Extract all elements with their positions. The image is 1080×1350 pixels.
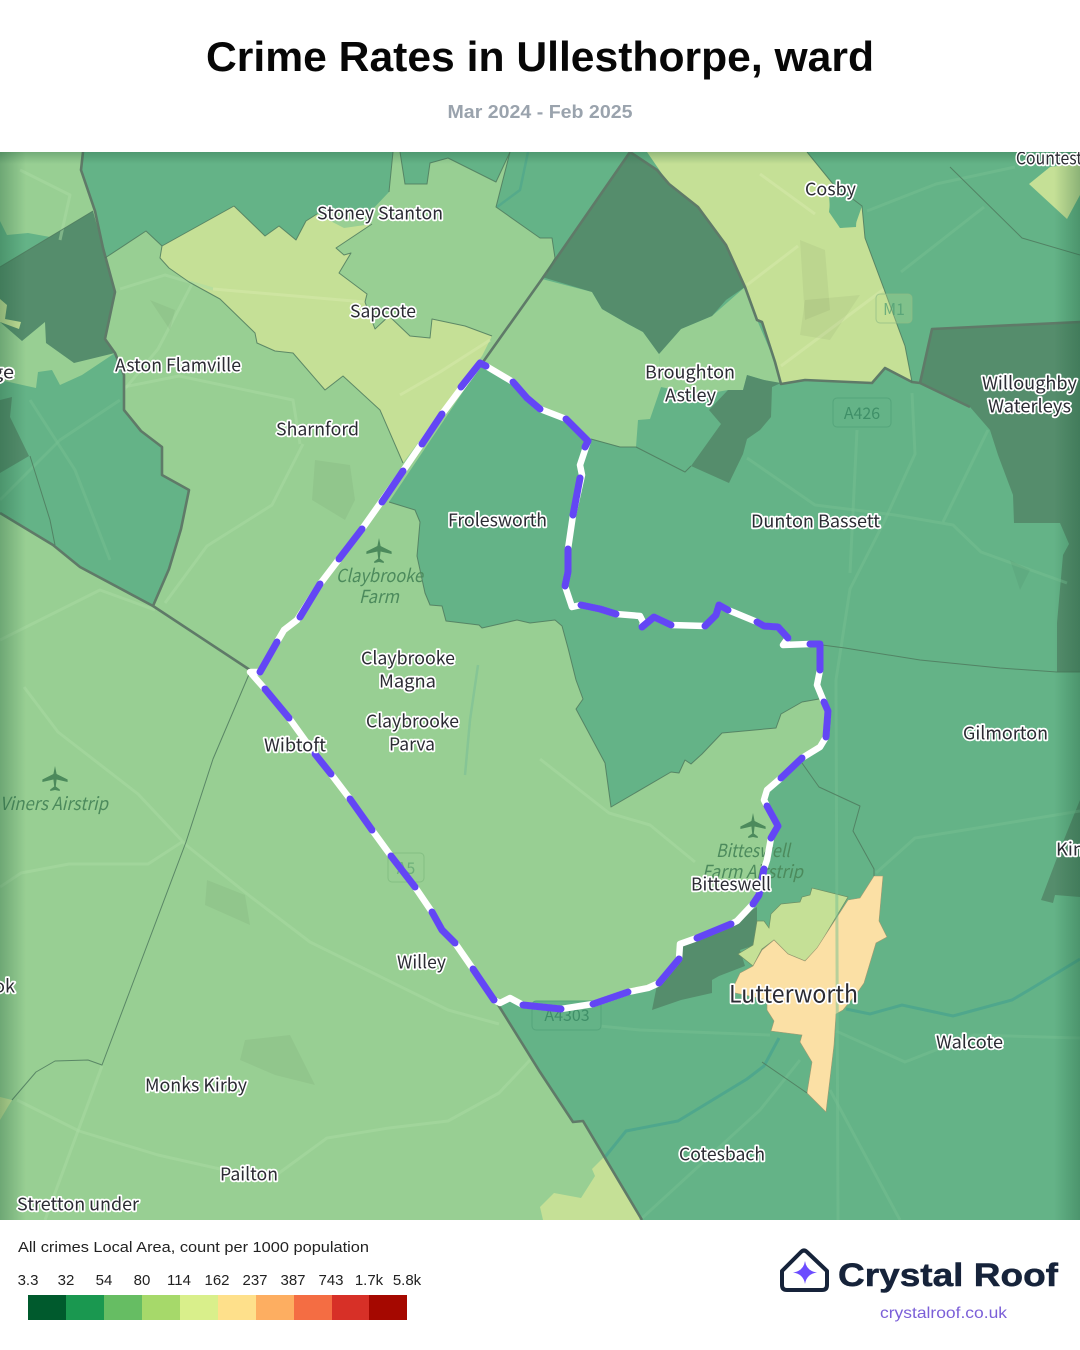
area: top mid green ward [400, 152, 510, 184]
area: west edge yellow patch [0, 299, 21, 329]
area: Cosby yellow-green ward [647, 152, 912, 384]
place labels: Claybrooke [361, 645, 455, 671]
place labels: Stoney Stanton [317, 200, 443, 226]
road sign: A426 [833, 398, 891, 427]
road sign: A5: A5 [397, 855, 415, 879]
place labels: Cotesbach [679, 1141, 765, 1167]
area: west dark patch [0, 397, 29, 473]
area: Lutterworth north yellow-green [738, 888, 848, 966]
road sign: M1 [876, 294, 912, 323]
place labels: Willey [397, 949, 447, 975]
road sign: A426: A426 [844, 400, 880, 424]
place labels: Parva [389, 731, 435, 757]
airstrip: Claybrooke Farm [338, 538, 424, 604]
place labels: Waterleys [988, 393, 1071, 419]
woodland patches [150, 240, 860, 1084]
legend title: All crimes Local Area, count per 1000 population [18, 1239, 369, 1256]
place labels: Monks Kirby [145, 1072, 248, 1098]
place labels: Magna [379, 668, 436, 694]
website: crystalroof.co.uk [880, 1305, 1008, 1322]
logo: Crystal Roof [782, 1250, 1058, 1322]
legend scale values: 1.7k [355, 1272, 384, 1289]
roads on mid green areas [0, 167, 1080, 1220]
area: north mid green ward [496, 152, 628, 258]
legend scale values: 387 [280, 1272, 306, 1289]
legend scale values: 32 [58, 1272, 74, 1289]
place labels: Aston Flamville [115, 352, 241, 378]
area: Lutterworth west dark ward [652, 907, 757, 1010]
place labels: Wibtoft [264, 732, 326, 758]
map panel [0, 145, 1080, 1220]
place labels: Bitteswell [691, 871, 771, 897]
roads on light green areas [0, 170, 695, 1220]
place labels: Walcote [936, 1029, 1003, 1055]
legend [18, 1239, 422, 1320]
area: south-west yellow patch [0, 1097, 12, 1120]
legend scale values: 162 [204, 1272, 230, 1289]
airstrip: Bitteswell Farm Airstrip [702, 813, 805, 884]
icon: house with star [782, 1250, 827, 1290]
logo wordmark: Crystal Roof [838, 1257, 1058, 1293]
map edge shading [0, 152, 1080, 1220]
airstrip: Bitteswell Farm Airstrip: Bitteswell [716, 837, 792, 863]
place labels [0, 145, 1080, 1217]
area: light green ward north of Frolesworth [483, 279, 661, 447]
place labels: Claybrooke [366, 708, 459, 734]
ward boundary: Ullesthorpe [250, 363, 828, 1009]
road sign: A4303: A4303 [544, 1002, 590, 1026]
area: west dark ward [0, 211, 115, 363]
airstrip: Viners Airstrip: Viners Airstrip [0, 790, 110, 816]
area: dark ward north [542, 152, 745, 354]
legend scale values: 237 [242, 1272, 268, 1289]
road sign: M1: M1 [883, 296, 905, 320]
road sign: A5 [388, 853, 424, 882]
area: Broughton Astley light green [659, 287, 781, 395]
area: Cosby small green patch [829, 204, 856, 228]
place labels: Stretton under [17, 1191, 140, 1217]
legend scale values: 5.8k [393, 1272, 422, 1289]
area: south yellow-green ward [540, 1157, 642, 1220]
roads on yellow-green areas [213, 174, 884, 395]
title: Crime Rates in Ullesthorpe, ward [206, 33, 874, 80]
airstrip: Bitteswell Farm Airstrip: Farm Airstrip [702, 858, 805, 884]
area: Kin dark ward [1041, 800, 1080, 903]
place labels: Willoughby [982, 370, 1078, 396]
legend scale values: 114 [167, 1272, 191, 1289]
legend scale values: 743 [318, 1272, 344, 1289]
airstrip: Claybrooke Farm: Claybrooke [336, 562, 425, 588]
subtitle: date range: Mar 2024 - Feb 2025 [448, 102, 632, 122]
rivers [465, 152, 1080, 1157]
place labels: Broughton [645, 359, 735, 385]
place labels: Lutterworth [729, 975, 858, 1010]
area: top-left mid green wards [81, 152, 393, 258]
place labels: Cosby [805, 176, 857, 202]
place labels: Dunton Bassett [751, 508, 880, 534]
legend scale values: 80 [134, 1272, 150, 1289]
airstrip: Viners Airstrip [0, 766, 110, 816]
area: west mid green ward [0, 353, 189, 606]
area: main mid green wards east of ward boundary [389, 152, 1080, 1220]
area: Willoughby Waterleys dark ward [920, 322, 1080, 672]
place labels: Frolesworth [448, 507, 547, 533]
legend scale values: 3.3 [18, 1272, 38, 1289]
place labels: Pailton [220, 1161, 278, 1187]
place labels: Gilmorton [963, 720, 1048, 746]
area: Sapcote yellow-green ward [160, 206, 492, 463]
area: Lutterworth peach ward [731, 876, 887, 1112]
area: Countesthorpe yellow patch [1029, 165, 1080, 219]
boundary lines [0, 152, 1080, 1220]
area: Broughton Astley dark ward [691, 375, 781, 483]
airstrip: Claybrooke Farm: Farm [359, 583, 400, 609]
road sign: A4303 [532, 1001, 601, 1030]
place labels: Astley [665, 382, 717, 408]
legend colour bar [28, 1295, 407, 1320]
legend scale values [18, 1272, 422, 1289]
place labels: Sharnford [276, 416, 359, 442]
legend scale values: 54 [96, 1272, 112, 1289]
place labels: Sapcote [350, 298, 416, 324]
area: west mid green wards [0, 221, 50, 267]
